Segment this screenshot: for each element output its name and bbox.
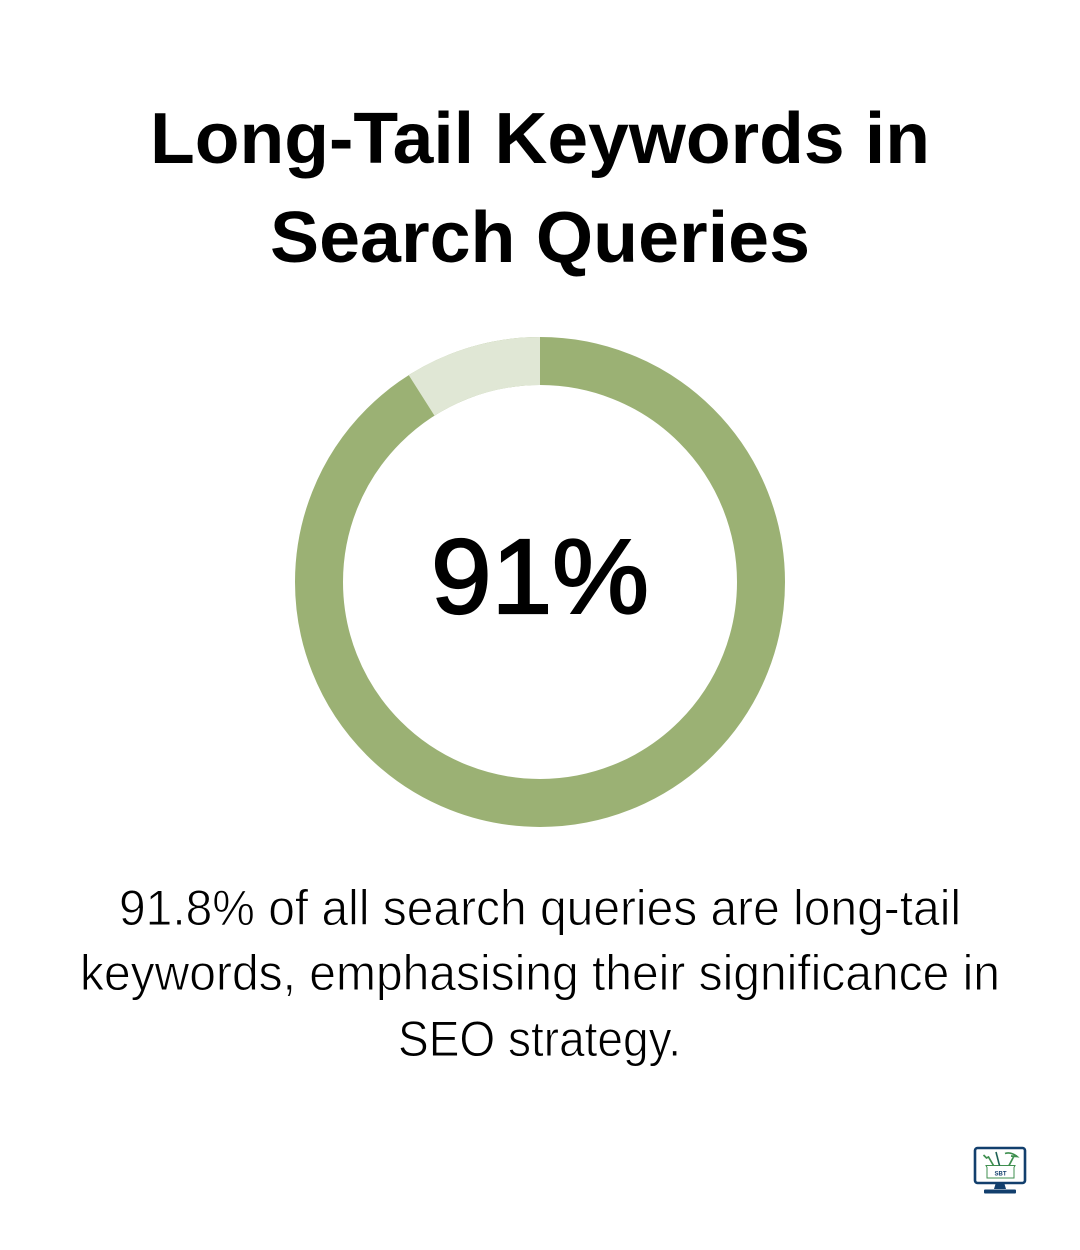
icon: SBT toolbox monitor logo [975,1148,1025,1194]
title: Search Queries [270,198,810,278]
title: Long-Tail Keywords in [150,99,930,179]
description text [80,880,1000,1067]
description text: 91.8% of all search queries are long-tail [119,880,961,936]
icon: SBT toolbox monitor logo: SBT [994,1172,1007,1178]
description text: keywords, emphasising their significance in [80,945,1000,1001]
description text: SEO strategy. [398,1011,681,1067]
donut value: 91% [431,518,649,636]
donut chart: 91% [319,361,761,803]
title [150,99,930,278]
